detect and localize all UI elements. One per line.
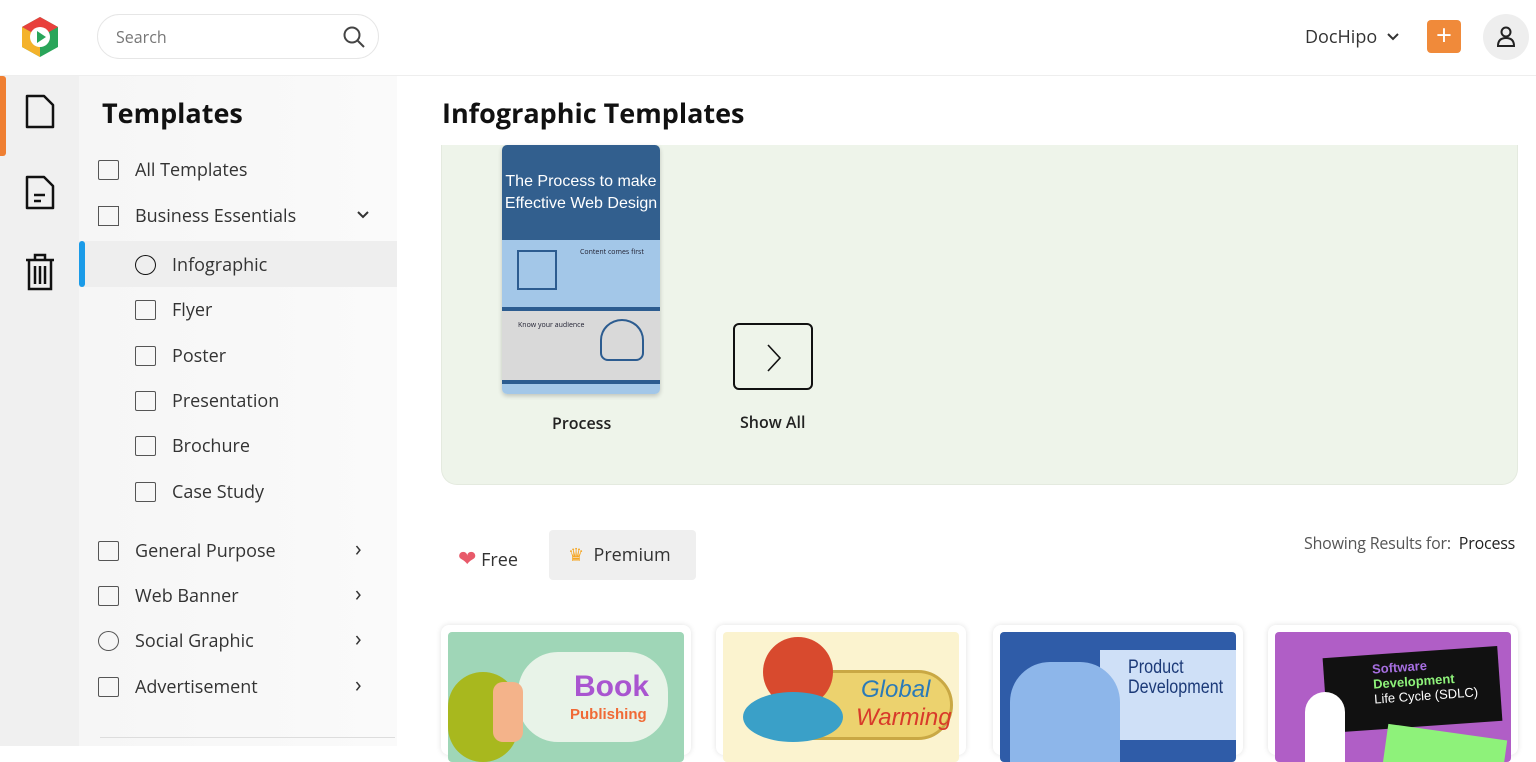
tab: premium: [549, 530, 696, 580]
thumbnail: process: Content comes first: [580, 248, 644, 257]
thumbnail: process: The Process to make: [505, 173, 657, 190]
panel: featured: [441, 145, 1518, 485]
show all button: [733, 323, 813, 390]
thumbnail: process: Know your audience: [518, 321, 584, 330]
header: [0, 0, 1536, 76]
text: Advertisement: [135, 675, 258, 699]
icon: search: [344, 26, 365, 48]
card: sdlc: Software: [1372, 658, 1427, 677]
card: product development: Development: [1128, 677, 1223, 698]
icon: text doc: [26, 176, 54, 210]
card: global warming: Warming: [856, 704, 952, 731]
tab: free: ❤ Free: [458, 543, 518, 573]
card: sdlc: Life Cycle (SDLC): [1374, 684, 1478, 707]
thumbnail: process: Effective Web Design: [505, 195, 657, 212]
card: book publishing: Book: [574, 670, 649, 703]
text: ›: [355, 623, 362, 653]
card: global warming: [716, 625, 966, 755]
text: General Purpose: [135, 539, 276, 563]
logo: [22, 17, 58, 57]
add button: +: [1436, 16, 1452, 54]
text: Brochure: [172, 434, 250, 458]
text: Web Banner: [135, 584, 239, 608]
text: Infographic: [172, 253, 267, 277]
icon rail: [0, 76, 79, 746]
account menu: DocHipo: [1305, 25, 1377, 49]
add button: [1427, 20, 1461, 53]
card: sdlc: Development: [1373, 671, 1455, 692]
search box: Search: [116, 26, 167, 48]
panel: featured: Show All: [740, 411, 805, 433]
text: ›: [355, 669, 362, 699]
text: Flyer: [172, 298, 212, 322]
text: Social Graphic: [135, 629, 254, 653]
thumbnail: process: [502, 145, 660, 394]
card: product development: Product: [1128, 657, 1184, 678]
sidebar: [79, 76, 397, 746]
icon: document: [26, 94, 54, 128]
card: global warming: Global: [861, 676, 930, 703]
text: Case Study: [172, 480, 264, 504]
search box: [97, 14, 379, 59]
text: Presentation: [172, 389, 279, 413]
active highlight: [79, 241, 397, 287]
avatar: [1483, 14, 1529, 60]
icon: trash: [26, 254, 54, 290]
card: sdlc: [1268, 625, 1518, 755]
card: book publishing: [441, 625, 691, 755]
sidebar heading: Templates: [102, 94, 243, 131]
main title: Infographic Templates: [442, 94, 744, 131]
text: ›: [355, 533, 362, 563]
card: product development: [993, 625, 1243, 755]
results text: Showing Results for: Process: [1304, 532, 1515, 554]
tab: premium: ♛ Premium: [568, 543, 671, 567]
text: Business Essentials: [135, 204, 296, 228]
text: Poster: [172, 344, 226, 368]
text: ›: [355, 578, 362, 608]
nav items: All Templates: [135, 158, 248, 182]
label: process: Process: [552, 412, 611, 434]
card: book publishing: Publishing: [570, 706, 647, 723]
